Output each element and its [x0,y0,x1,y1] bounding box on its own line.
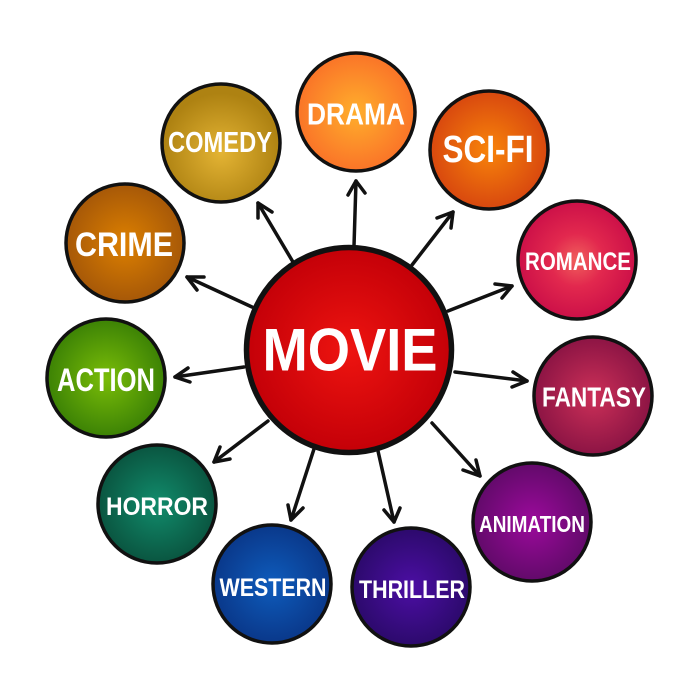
node: drama [297,53,415,171]
arrow: movie to fantasy [455,372,527,387]
arrow: movie to animation [432,423,480,476]
node: movie: MOVIE [262,316,438,384]
arrow: movie to comedy [258,203,293,262]
node: animation: ANIMATION [479,511,585,537]
arrow: movie to crime [187,277,252,307]
node: animation [473,463,591,581]
node: crime: CRIME [75,226,173,264]
node: sci-fi: SCI-FI [442,129,534,171]
arrow: movie to thriller [378,451,400,522]
node: action [47,319,165,437]
arrow: movie to action [175,367,244,382]
node: sci-fi [430,91,548,209]
node: romance: ROMANCE [525,248,631,276]
arrow: movie to western [288,449,314,520]
node: romance [518,201,636,319]
arrow: movie to sci-fi [412,212,453,265]
node: horror: HORROR [106,493,208,521]
node: fantasy: FANTASY [542,382,646,412]
node: horror [98,445,216,563]
arrow: movie to drama [348,181,365,246]
node: western [213,525,331,643]
node: drama: DRAMA [307,96,405,132]
node: action: ACTION [57,362,155,398]
node: crime [66,184,184,302]
node: comedy [162,84,280,202]
arrow: movie to romance [448,284,512,311]
node: thriller: THRILLER [359,576,465,604]
node: movie [246,248,452,452]
arrow: movie to horror [214,421,268,462]
node: comedy: COMEDY [168,127,272,159]
node: western: WESTERN [220,574,326,602]
node: fantasy [534,337,652,455]
node: thriller [352,528,470,646]
